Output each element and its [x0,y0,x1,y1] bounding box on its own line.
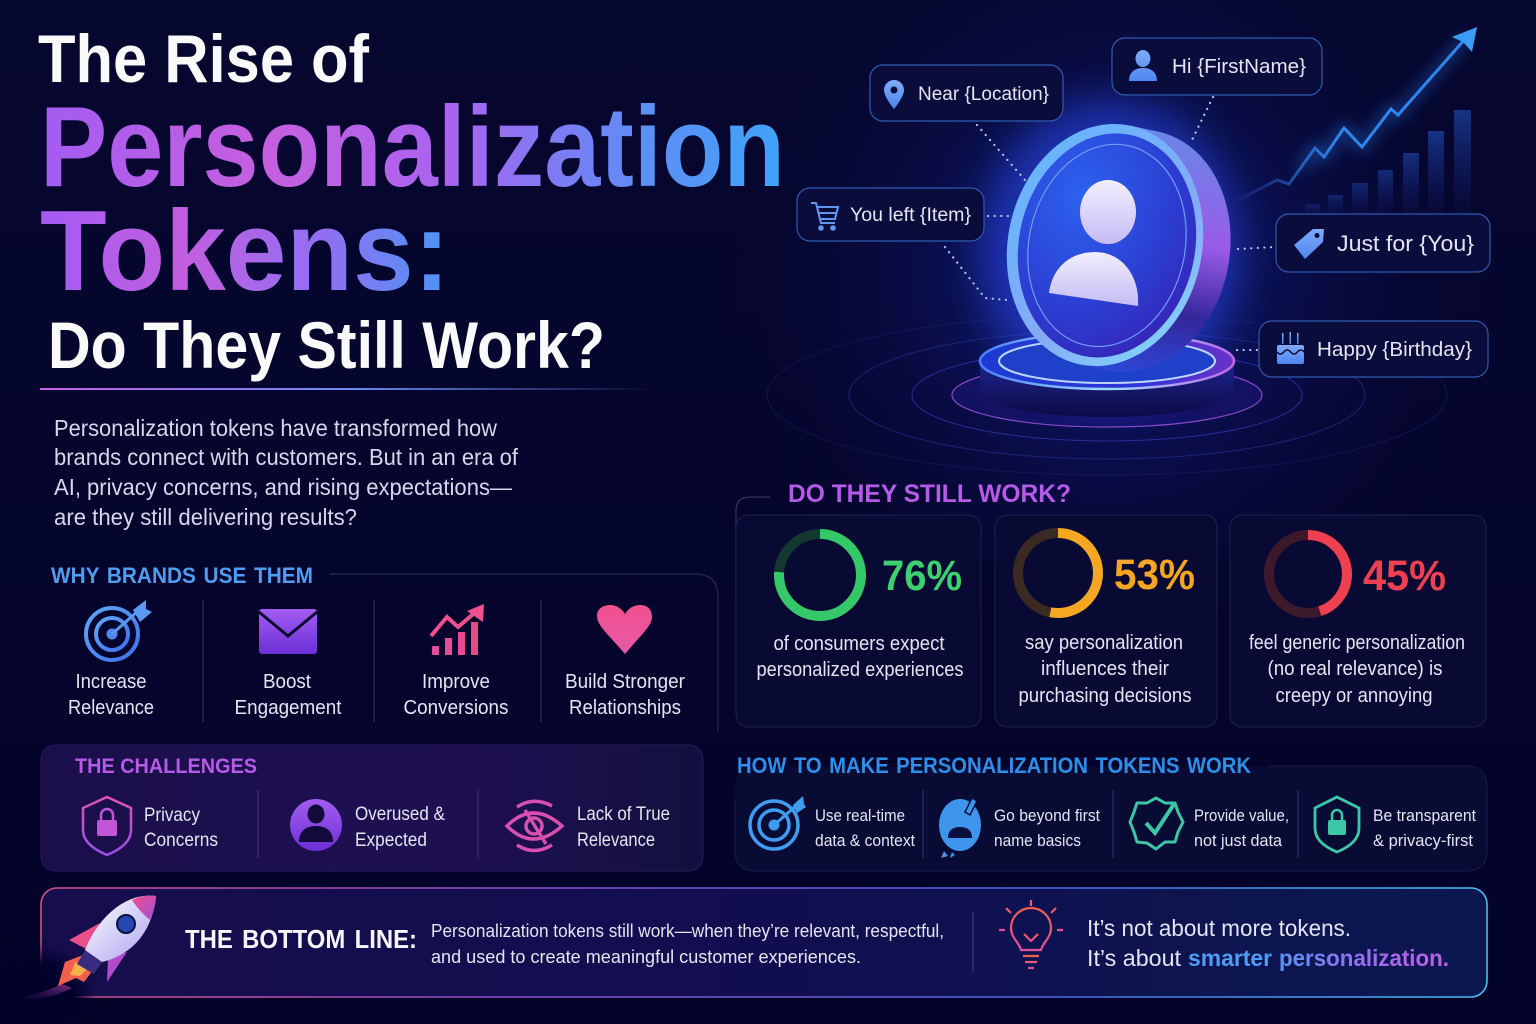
panel: the challenges [41,745,703,871]
pedestal [980,333,1234,417]
icon: price tag [1294,229,1324,259]
item: transparent and privacy-first: & privacy-first [1373,831,1473,850]
token: You left {Item} [797,188,984,241]
item: increase relevance: Relevance [68,697,154,719]
icon: shopping cart [811,203,838,230]
stat card: 76% [736,515,981,727]
intro paragraph: Personalization tokens have transformed how [54,415,497,441]
item: boost engagement [234,609,342,719]
stat card: 76%: of consumers expect [774,633,945,655]
item: beyond first name [939,798,1100,858]
donut: 53 percent [1018,533,1098,613]
intro paragraph: brands connect with customers. But in an era of [54,444,519,470]
item: real-time data: data & context [815,831,915,850]
item: overused and expected [290,799,445,851]
item: build stronger relationships: Build Stronger [565,671,685,693]
section: why brands use them [51,563,718,732]
heading: DO THEY STILL WORK? [788,480,1071,508]
stat card: 76%: personalized experiences [756,659,964,681]
icon: light bulb [999,900,1063,968]
item: privacy concerns: Privacy [144,805,200,826]
token: Happy {Birthday}: Happy {Birthday} [1317,339,1472,361]
icon: shield with lock [1315,797,1359,852]
item: privacy concerns: Concerns [144,830,218,851]
coin person icon [1049,180,1138,306]
item: improve conversions: Conversions [404,697,508,719]
stat card: 53%: influences their [1041,658,1169,680]
stat card: 53% [995,515,1217,727]
icon: check badge [1130,798,1183,849]
stat card: 45%: feel generic personalization [1249,632,1465,654]
coin [985,105,1253,390]
item: overused and expected: Expected [355,830,427,851]
icon: crossed-out eye [507,801,562,850]
panel: how to make tokens work [735,753,1487,871]
item: provide value: not just data [1194,831,1283,850]
growth chart [1238,27,1477,216]
icon: target [86,600,152,660]
icon: rising chart [431,604,484,655]
item: transparent and privacy-first: Be transparent [1373,806,1476,825]
icon: heart [597,605,652,654]
icon: location pin [884,80,904,109]
stat card: 45%: 45% [1363,552,1446,600]
title: Personalization [40,84,785,211]
item: boost engagement: Engagement [234,697,342,719]
token: Hi {FirstName} [1112,38,1322,95]
stat card: 45% [1230,515,1486,727]
item: boost engagement: Boost [263,671,311,693]
token: You left {Item}: You left {Item} [850,205,971,226]
item: lack of true relevance: Relevance [577,830,655,851]
item: improve conversions [404,604,508,719]
intro paragraph: AI, privacy concerns, and rising expectations— [54,474,512,500]
stat card: 45%: creepy or annoying [1276,685,1432,707]
heading: WHY BRANDS USE THEM [51,563,313,588]
panel: the bottom line: Personalization tokens still work—when they’re relevant, respectful, [431,921,944,941]
item: improve conversions: Improve [422,671,490,693]
item: build stronger relationships: Relationships [569,697,681,719]
item: transparent and privacy-first [1315,797,1476,852]
icon: birthday cake [1277,332,1304,364]
panel: the bottom line: smarter [1188,945,1272,971]
item: lack of true relevance [507,801,670,851]
panel: the bottom line: THE BOTTOM LINE: [185,924,417,954]
heading: HOW TO MAKE PERSONALIZATION TOKENS WORK [737,753,1251,778]
panel: the bottom line: and used to create meaningful customer experiences. [431,947,861,967]
heading: THE CHALLENGES [75,755,257,778]
icon: envelope [259,609,317,654]
item: real-time data: Use real-time [815,806,905,825]
item: overused and expected: Overused & [355,804,445,825]
token: Hi {FirstName}: Hi {FirstName} [1172,56,1306,78]
stat card: 45%: (no real relevance) is [1268,658,1442,680]
token: Near {Location} [870,65,1063,121]
item: provide value: Provide value, [1194,806,1289,825]
icon: user bubble [939,798,981,858]
item: lack of true relevance: Lack of True [577,804,670,825]
icon: user circle [290,799,342,851]
item: privacy concerns [83,797,218,855]
token: Near {Location}: Near {Location} [918,84,1049,105]
item: provide value [1130,798,1289,850]
token: Happy {Birthday} [1259,321,1488,377]
title [38,21,785,382]
icon: shield with lock [83,797,131,855]
intro paragraph: are they still delivering results? [54,504,357,530]
title: Do They Still Work? [48,308,605,382]
intro paragraph [54,415,519,530]
item: real-time data [750,796,915,850]
icon: rocket [14,896,156,999]
item: increase relevance [68,600,154,719]
icon: target [750,796,806,849]
item: beyond first name: name basics [994,831,1081,850]
stat card: 53%: purchasing decisions [1018,685,1192,707]
stat card: 53%: say personalization [1025,632,1183,654]
panel: the bottom line [0,888,1487,1024]
stat card: 76%: 76% [882,552,962,600]
floor rings [767,315,1447,475]
item: build stronger relationships [565,605,685,719]
panel: the bottom line: It’s about [1087,945,1182,971]
panel: the bottom line: personalization. [1279,945,1449,971]
donut: 45 percent [1269,535,1347,613]
token: Just for {You}: Just for {You} [1337,231,1474,256]
dotted connectors [945,97,1275,350]
hero illustration: token coin on pedestal [767,27,1477,475]
title: The Rise of [38,21,369,97]
item: beyond first name: Go beyond first [994,806,1100,825]
stat card: 53%: 53% [1114,551,1195,599]
item: increase relevance: Increase [76,671,146,693]
token: Just for {You} [1276,214,1490,272]
section: do they still work [736,480,1486,727]
icon: user [1129,50,1157,81]
title: Tokens: [40,188,450,315]
panel: the bottom line: It’s not about more tokens. [1087,915,1351,941]
donut: 76 percent [779,534,861,616]
